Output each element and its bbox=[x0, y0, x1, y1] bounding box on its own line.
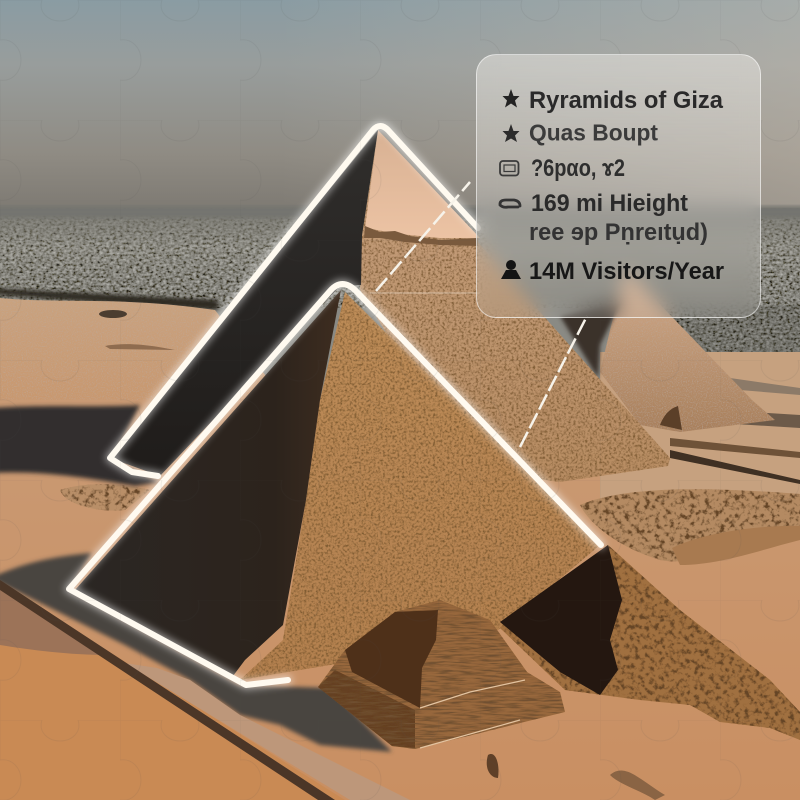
label: visitors per year: 14M Visitors/Year bbox=[528, 258, 724, 284]
glowing outline: front pyramid bbox=[69, 284, 601, 685]
third distant pyramid bbox=[560, 268, 775, 432]
icon: link bbox=[500, 200, 520, 207]
glowing outline: back pyramid bbox=[110, 126, 478, 476]
desert ground bbox=[0, 298, 800, 800]
label: Ryramids of Giza: Ryramids of Giza bbox=[528, 86, 723, 114]
front pyramid shadow face bbox=[75, 290, 341, 676]
icon: person bbox=[500, 260, 520, 278]
front pyramid shadow band on ground bbox=[0, 553, 410, 800]
icon: screen bbox=[500, 160, 518, 175]
sky bbox=[0, 0, 800, 215]
icon: star 2 bbox=[502, 124, 519, 142]
stepped ruin bbox=[318, 600, 565, 749]
label: height: 169 mi Hieight bbox=[530, 190, 688, 216]
icon: star 1 bbox=[502, 88, 519, 107]
front pyramid lit face bbox=[240, 292, 600, 680]
back pyramid lit face bbox=[360, 130, 670, 482]
label: garbled height note: ree ɘp Pṇreıtụd) bbox=[528, 218, 708, 246]
ground debris patches bbox=[60, 484, 800, 800]
label: garbled dimensions: ?6pαo, ɤ2 bbox=[530, 154, 624, 182]
back pyramid shadow on ground bbox=[0, 405, 160, 486]
label: Quas Boupt: Quas Boupt bbox=[528, 119, 658, 145]
city skyline band bbox=[0, 206, 800, 360]
info panel bbox=[476, 54, 761, 318]
dashed callout leader: upper bbox=[376, 182, 470, 291]
small right pyramid bbox=[500, 545, 800, 740]
back pyramid shadow face bbox=[110, 130, 378, 476]
dashed callout leader: lower bbox=[520, 316, 587, 447]
